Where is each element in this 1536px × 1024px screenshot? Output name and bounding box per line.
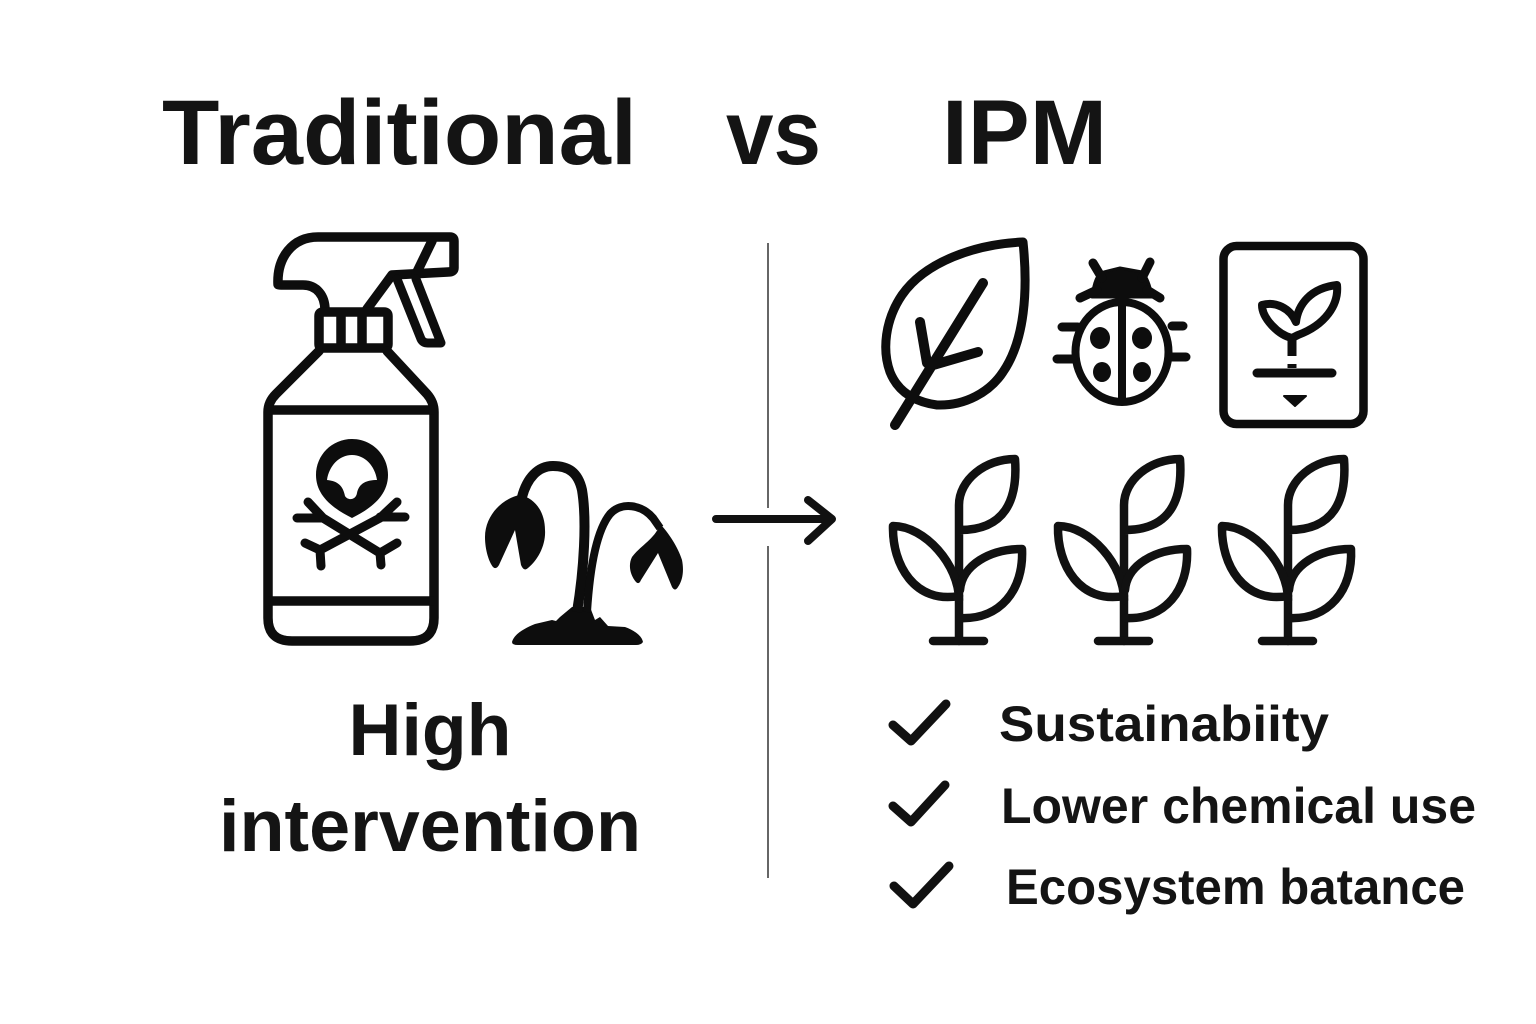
soil xyxy=(512,607,643,645)
icon: spray bottle with skull label xyxy=(268,237,454,641)
icon: ladybug xyxy=(1057,262,1186,402)
right stem xyxy=(587,506,660,612)
right bud xyxy=(630,524,683,590)
left stem xyxy=(522,466,584,612)
label: High intervention: High xyxy=(348,690,512,771)
title: Traditional: Traditional xyxy=(162,82,637,184)
icon: skull xyxy=(316,439,388,518)
icon: leaf xyxy=(886,242,1025,425)
check item: Ecosystem batance: Ecosystem batance xyxy=(1006,859,1465,915)
check item: Lower chemical use: Lower chemical use xyxy=(1001,778,1476,834)
icon: crossbones xyxy=(297,502,405,566)
icon: plant 3 xyxy=(1222,459,1351,641)
arrow xyxy=(716,500,832,541)
title: IPM: IPM xyxy=(942,82,1107,184)
center divider xyxy=(767,243,769,878)
bottle body xyxy=(268,351,434,641)
trigger xyxy=(397,279,441,343)
icon: plant 2 xyxy=(1058,459,1187,641)
label: High intervention: intervention xyxy=(219,786,641,867)
icon: tablet with sprout xyxy=(1224,246,1364,424)
icon: plant 1 xyxy=(893,459,1022,641)
icon: wilted plant xyxy=(485,466,683,645)
check item: Sustainabiity: Sustainabiity xyxy=(999,696,1329,752)
nozzle diagonal xyxy=(416,241,432,274)
spray head xyxy=(278,237,454,310)
collar xyxy=(319,312,388,348)
title: vs: vs xyxy=(726,82,821,184)
left bud xyxy=(485,495,545,569)
label: High intervention xyxy=(219,690,641,867)
label bands xyxy=(268,410,434,601)
icon: row of three plants xyxy=(893,459,1351,641)
